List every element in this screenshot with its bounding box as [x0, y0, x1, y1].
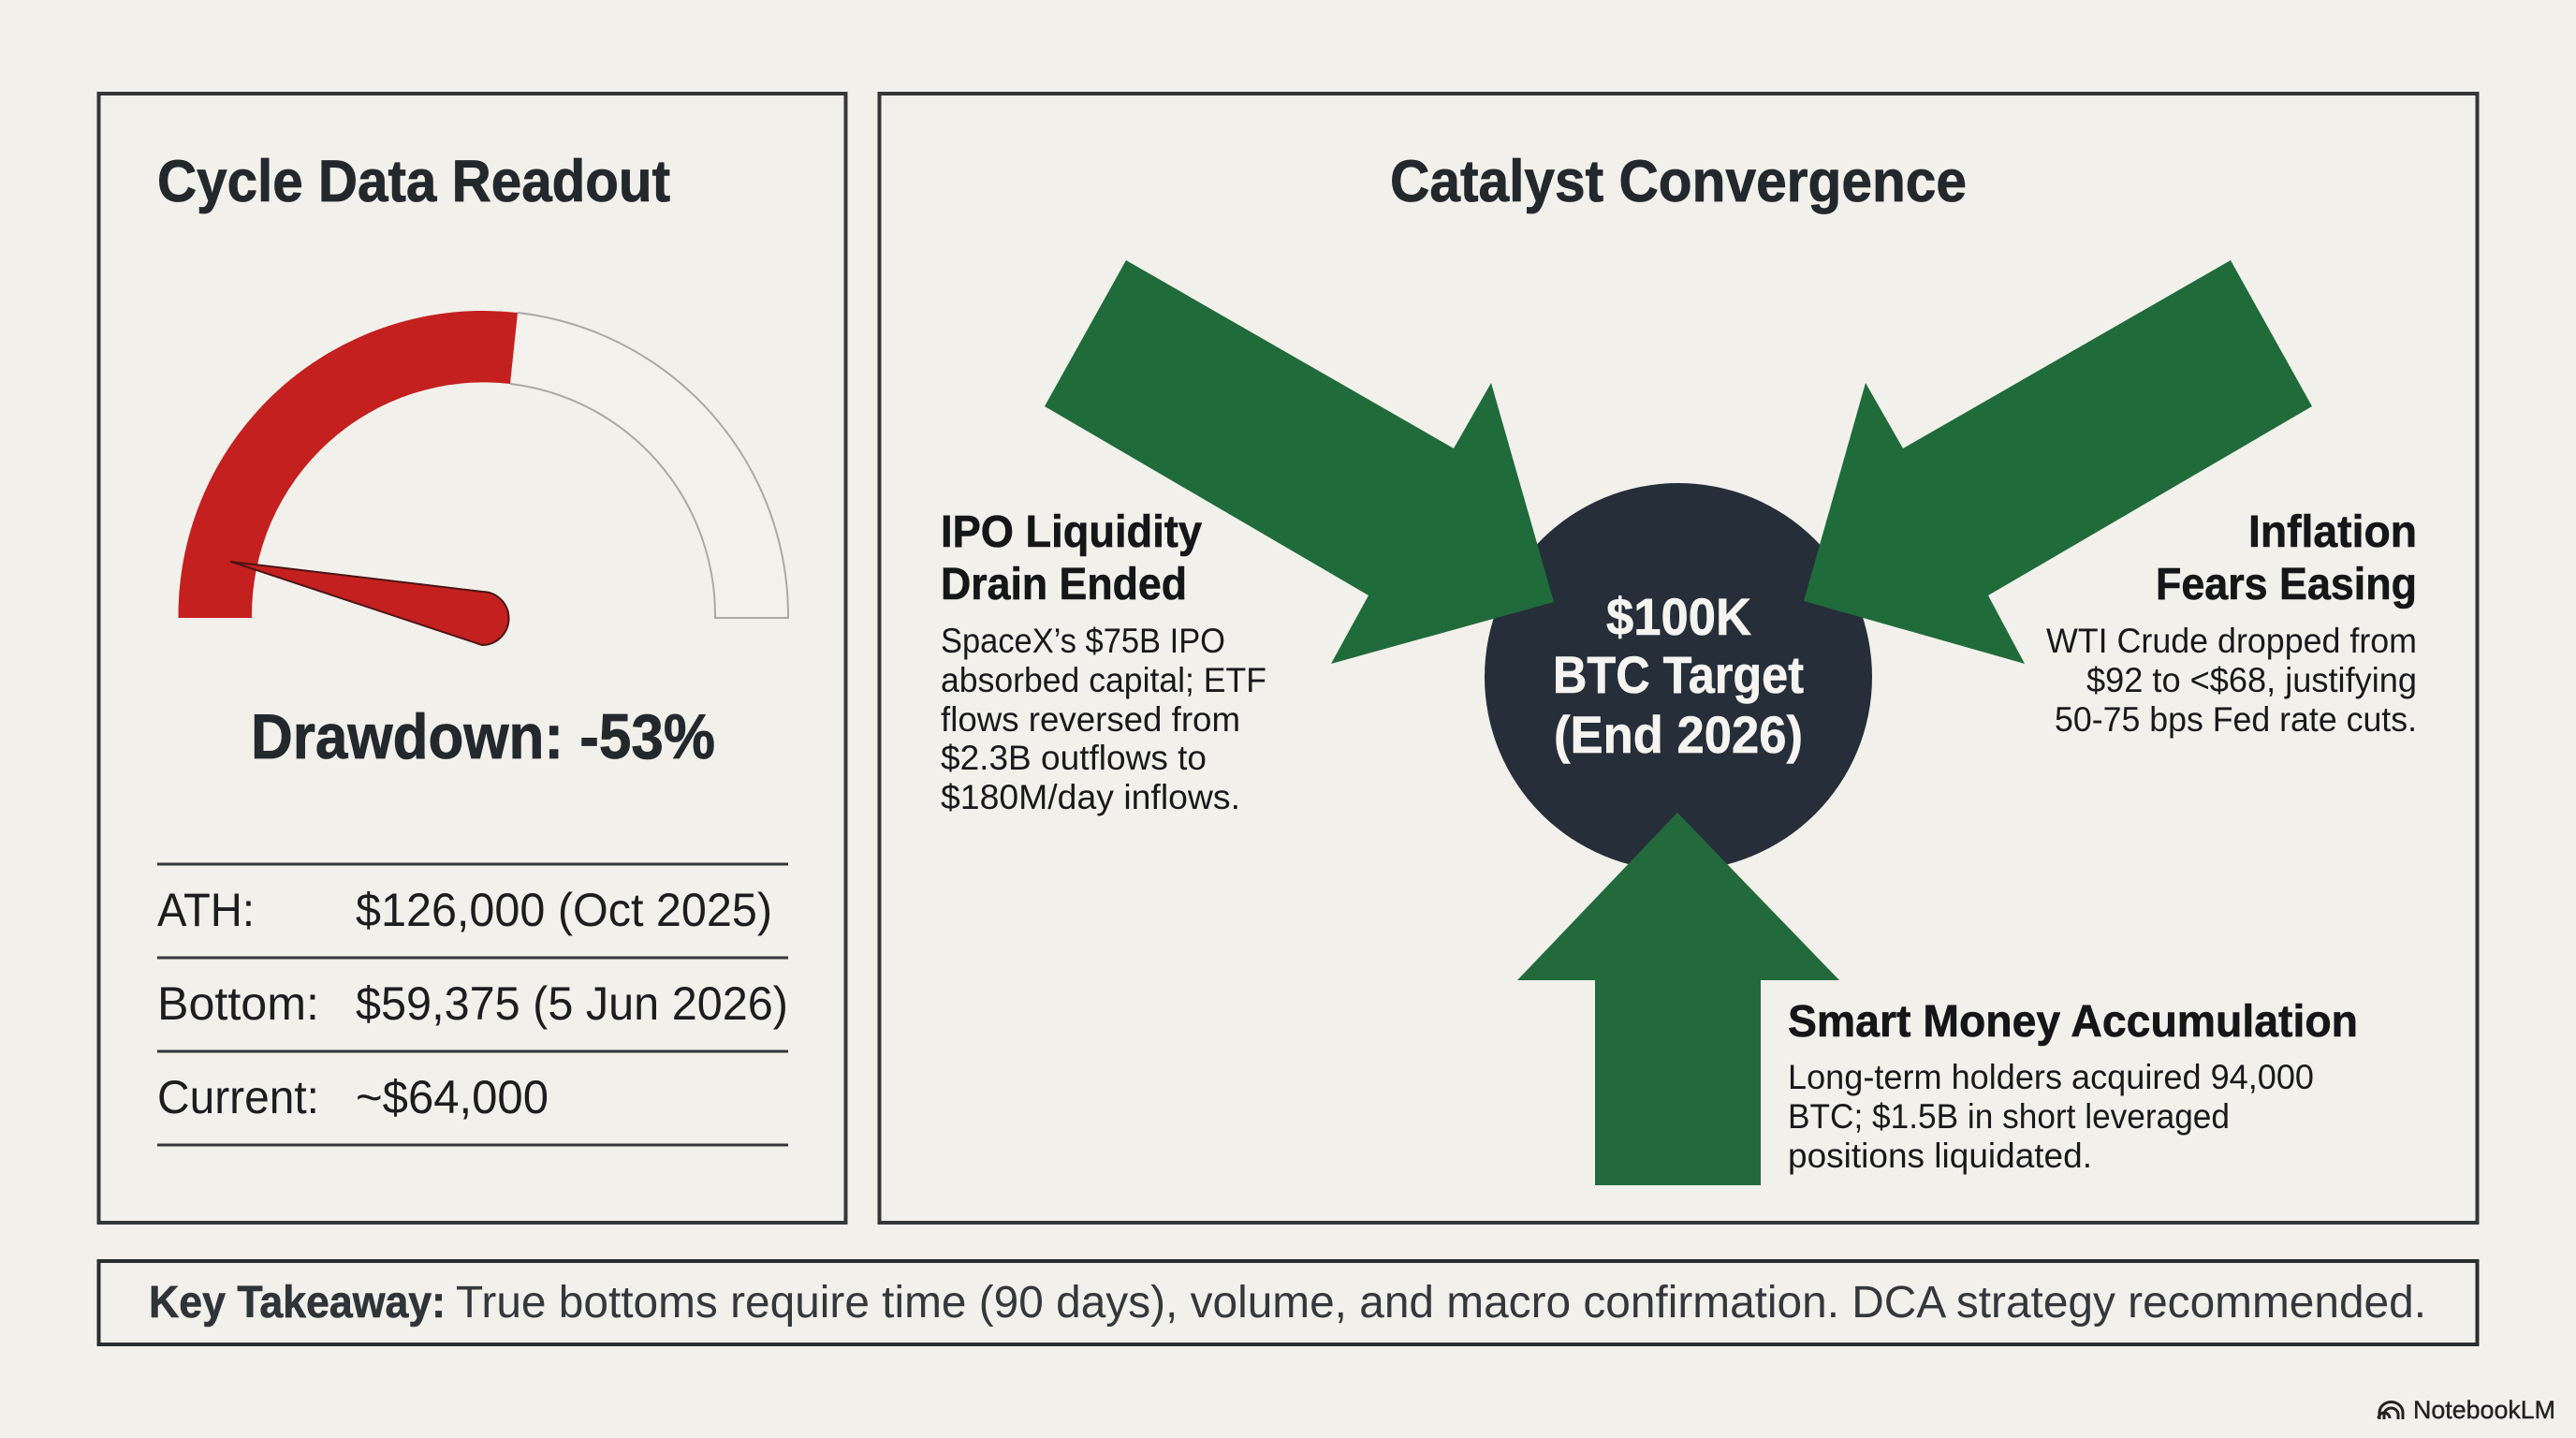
text block: IPO liquidity: absorbed capital; ETF: [941, 661, 1266, 699]
row: ATH: $126,000 (Oct 2025): [356, 884, 772, 936]
row: ATH: [157, 884, 772, 936]
icon: NotebookLM logo: [2378, 1402, 2403, 1419]
text block: inflation: Inflation: [2248, 507, 2417, 557]
row: bottom: [157, 977, 788, 1030]
arrow: left catalyst: [1045, 260, 1554, 664]
text block: IPO liquidity: $2.3B outflows to: [941, 739, 1207, 777]
text block: inflation: $92 to <$68, justifying: [2086, 661, 2417, 699]
row: bottom: Bottom:: [157, 977, 319, 1030]
text block: smart money: Long-term holders acquired 94,000: [1788, 1058, 2314, 1096]
text block: IPO liquidity: $180M/day inflows.: [941, 778, 1240, 816]
text block: inflation: [2046, 507, 2417, 739]
center circle: BTC target: BTC Target: [1553, 645, 1804, 704]
text block: IPO liquidity: flows reversed from: [941, 700, 1240, 739]
text block: smart money: BTC; $1.5B in short leveraged: [1788, 1097, 2230, 1136]
center circle: BTC target: $100K: [1606, 587, 1751, 646]
gauge red fill: [178, 311, 518, 618]
text block: inflation: Fears Easing: [2156, 560, 2417, 609]
text block: IPO liquidity: Drain Ended: [941, 560, 1187, 609]
gauge track: [510, 313, 788, 618]
gauge chart: [178, 311, 788, 645]
row: current: [157, 1071, 549, 1123]
data table: [157, 863, 788, 1146]
center circle: BTC target: [1485, 483, 1872, 871]
row: bottom: $59,375 (5 Jun 2026): [356, 977, 788, 1030]
text block: IPO liquidity: SpaceX’s $75B IPO: [941, 622, 1225, 660]
text block: IPO liquidity: [941, 507, 1266, 816]
key takeaway bar: True bottoms require time (90 days), volume, and macro confirmation. DCA strategy recommended.: [456, 1278, 2426, 1328]
drawdown label: Drawdown: -53%: [251, 701, 715, 772]
text block: smart money: Smart Money Accumulation: [1788, 997, 2358, 1047]
row: ATH: ATH:: [157, 884, 255, 936]
row: current: Current:: [157, 1071, 319, 1123]
text block: IPO liquidity: IPO Liquidity: [941, 507, 1202, 557]
watermark: NotebookLM: NotebookLM: [2413, 1396, 2555, 1424]
text block: smart money: positions liquidated.: [1788, 1137, 2092, 1175]
row: current: ~$64,000: [356, 1071, 549, 1123]
heading: cycle data readout: Cycle Data Readout: [157, 149, 670, 214]
text block: inflation: 50-75 bps Fed rate cuts.: [2055, 700, 2417, 739]
text block: smart money: [1788, 997, 2358, 1175]
key takeaway bar: [99, 1261, 2477, 1344]
gauge needle: [231, 562, 509, 645]
key takeaway bar: Key Takeaway:: [149, 1278, 446, 1328]
text block: inflation: WTI Crude dropped from: [2046, 622, 2417, 660]
panel: cycle data readout: [99, 94, 846, 1223]
arrow: right catalyst: [1804, 260, 2312, 664]
arrow: bottom catalyst: [1517, 813, 1839, 1185]
center circle: BTC target: (End 2026): [1554, 705, 1803, 764]
panel: catalyst convergence: [880, 94, 2477, 1223]
heading: catalyst convergence: Catalyst Convergence: [1390, 149, 1967, 214]
